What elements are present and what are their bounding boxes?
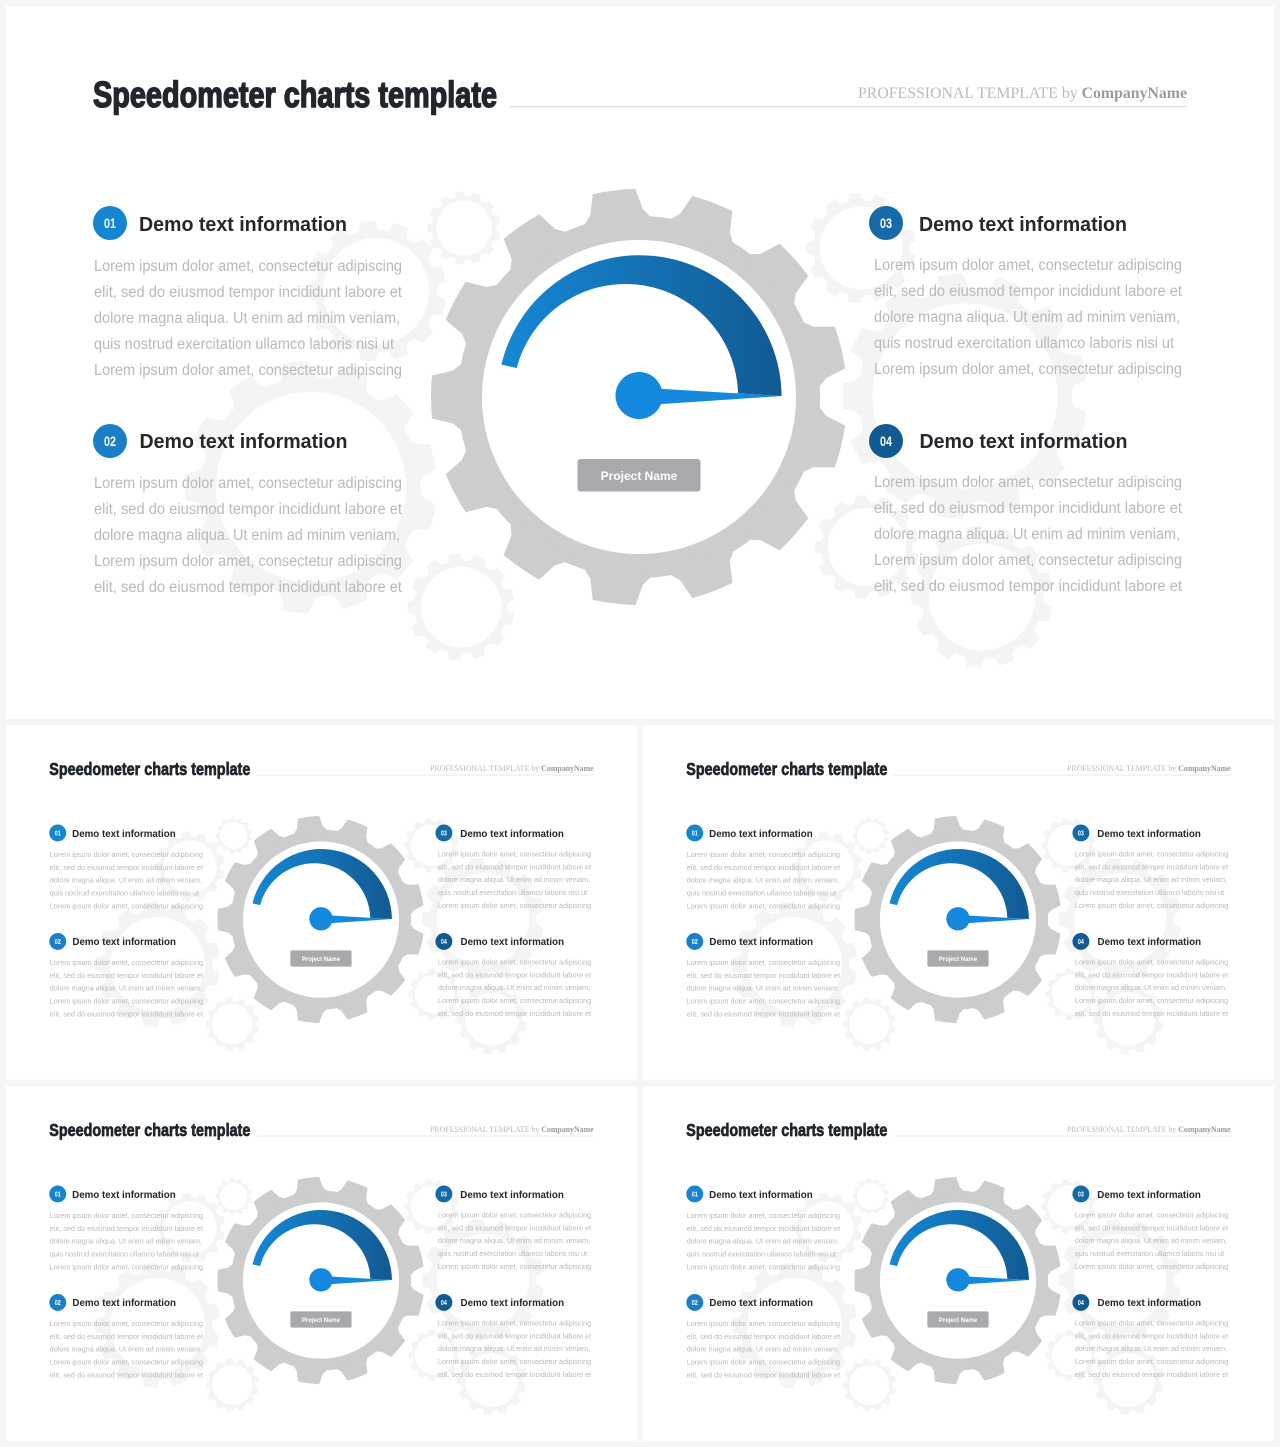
text block 01: Lorem ipsum dolor amet, consectetur adipiscing: [687, 850, 840, 859]
badge 02: [686, 1294, 703, 1311]
text block 04: [1075, 1318, 1229, 1379]
text block 02: Lorem ipsum dolor amet, consectetur adipiscing: [50, 1358, 203, 1367]
speedometer gauge: [501, 255, 782, 419]
text block 04: [438, 957, 592, 1018]
project name label: [927, 950, 989, 967]
panel: item 02: [49, 1294, 204, 1380]
badge 04: [435, 1294, 452, 1311]
text block 01: elit, sed do eiusmod tempor incididunt labore et: [50, 863, 204, 872]
main gear: [854, 815, 1062, 1024]
text block 02: Lorem ipsum dolor amet, consectetur adipiscing: [50, 958, 203, 967]
text block 02: Lorem ipsum dolor amet, consectetur adipiscing: [687, 997, 840, 1006]
slide: thumbnail top left: [6, 725, 637, 1080]
subtitle: PROFESSIONAL TEMPLATE by CompanyName: [1067, 1125, 1231, 1134]
text block 02: [50, 1319, 204, 1380]
text block 04: Lorem ipsum dolor amet, consectetur adipiscing: [1075, 1357, 1228, 1366]
text block 03: Lorem ipsum dolor amet, consectetur adipiscing: [1075, 1262, 1228, 1271]
panel: item 02: [686, 933, 841, 1019]
text block 02: Lorem ipsum dolor amet, consectetur adipiscing: [94, 553, 402, 570]
speedometer gauge: [890, 1210, 1029, 1292]
heading 03: Demo text information: [460, 1190, 564, 1201]
text block 02: dolore magna aliqua. Ut enim ad minim veniam,: [687, 1345, 839, 1354]
badge 03: [435, 1186, 452, 1202]
slide: thumbnail top right: [643, 725, 1274, 1080]
heading 03: Demo text information: [1097, 829, 1201, 840]
text block 02: [50, 958, 204, 1019]
panel: item 03: [1072, 825, 1229, 910]
text block 01: [50, 1211, 204, 1272]
text block 01: quis nostrud exercitation ullamco laboris nisi ut: [50, 889, 200, 898]
text block 01: Lorem ipsum dolor amet, consectetur adipiscing: [687, 1211, 840, 1220]
slide: thumbnail bottom right: [643, 1086, 1274, 1441]
badge 01: 01: [104, 215, 116, 231]
text block 04: elit, sed do eiusmod tempor incididunt labore et: [1075, 1370, 1229, 1379]
badge 03: 03: [441, 830, 447, 837]
text block 03: [874, 257, 1183, 378]
header rule: [894, 774, 1231, 776]
panel: item 03: [869, 206, 1183, 378]
badge 04: 04: [1078, 939, 1084, 946]
text block 03: Lorem ipsum dolor amet, consectetur adipiscing: [1075, 849, 1228, 858]
background gears: [732, 1178, 1182, 1416]
text block 04: elit, sed do eiusmod tempor incididunt labore et: [874, 500, 1183, 517]
text block 04: dolore magna aliqua. Ut enim ad minim veniam,: [438, 1344, 590, 1353]
slide: main large slide: [6, 6, 1274, 719]
slide: thumbnail bottom left: [6, 1086, 637, 1441]
text block 04: elit, sed do eiusmod tempor incididunt labore et: [438, 1370, 592, 1379]
title: Speedometer charts template: [49, 1120, 250, 1140]
project name label: Project Name: [939, 957, 978, 963]
title: Speedometer charts template: [686, 1120, 887, 1140]
text block 04: [438, 1318, 592, 1379]
text block 02: [687, 958, 841, 1019]
panel: item 03: [435, 825, 592, 910]
text block 01: dolore magna aliqua. Ut enim ad minim veniam,: [50, 1237, 202, 1246]
text block 03: Lorem ipsum dolor amet, consectetur adipiscing: [1075, 1210, 1228, 1219]
text block 02: elit, sed do eiusmod tempor incididunt labore et: [50, 971, 204, 980]
text block 04: elit, sed do eiusmod tempor incididunt labore et: [1075, 1009, 1229, 1018]
text block 03: Lorem ipsum dolor amet, consectetur adipiscing: [438, 849, 591, 858]
speedometer gauge: [890, 849, 1029, 931]
text block 01: elit, sed do eiusmod tempor incididunt labore et: [50, 1224, 204, 1233]
text block 04: Lorem ipsum dolor amet, consectetur adipiscing: [438, 1357, 591, 1366]
badge 01: [686, 1186, 703, 1202]
text block 01: [94, 258, 403, 379]
text block 01: [687, 850, 841, 911]
panel: item 02: [686, 1294, 841, 1380]
heading 03: Demo text information: [460, 829, 564, 840]
text block 03: dolore magna aliqua. Ut enim ad minim veniam,: [438, 875, 590, 884]
badge 01: 01: [692, 830, 698, 837]
badge 03: [869, 206, 903, 240]
badge 04: [1072, 933, 1089, 950]
badge 03: [435, 825, 452, 841]
panel: item 04: [1072, 933, 1229, 1018]
title: Speedometer charts template: [49, 759, 250, 779]
text block 02: dolore magna aliqua. Ut enim ad minim veniam,: [50, 1345, 202, 1354]
text block 04: Lorem ipsum dolor amet, consectetur adipiscing: [874, 552, 1182, 569]
header rule: [257, 774, 594, 776]
subtitle: PROFESSIONAL TEMPLATE by CompanyName: [430, 764, 594, 773]
project name label: [578, 459, 700, 492]
project name label: [927, 1311, 989, 1328]
heading 01: Demo text information: [72, 829, 176, 840]
badge 02: 02: [692, 1300, 698, 1307]
text block 04: elit, sed do eiusmod tempor incididunt labore et: [438, 1009, 592, 1018]
text block 01: quis nostrud exercitation ullamco laboris nisi ut: [94, 336, 395, 353]
badge 02: 02: [55, 1300, 61, 1307]
header rule: [257, 1135, 594, 1137]
project name label: [290, 950, 352, 967]
main gear: [217, 815, 425, 1024]
panel: item 01: [49, 1186, 204, 1272]
project name label: Project Name: [939, 1318, 978, 1324]
heading 01: Demo text information: [709, 829, 813, 840]
title: Speedometer charts template: [93, 74, 497, 115]
text block 01: Lorem ipsum dolor amet, consectetur adipiscing: [50, 1263, 203, 1272]
text block 03: Lorem ipsum dolor amet, consectetur adipiscing: [874, 361, 1182, 378]
text block 02: dolore magna aliqua. Ut enim ad minim veniam,: [687, 984, 839, 993]
text block 02: elit, sed do eiusmod tempor incididunt labore et: [50, 1332, 204, 1341]
text block 03: Lorem ipsum dolor amet, consectetur adipiscing: [438, 1210, 591, 1219]
heading 03: Demo text information: [1097, 1190, 1201, 1201]
badge 03: 03: [1078, 1191, 1084, 1198]
text block 01: dolore magna aliqua. Ut enim ad minim veniam,: [687, 1237, 839, 1246]
text block 02: elit, sed do eiusmod tempor incididunt labore et: [50, 1010, 204, 1019]
text block 04: elit, sed do eiusmod tempor incididunt labore et: [1075, 970, 1229, 979]
text block 02: Lorem ipsum dolor amet, consectetur adipiscing: [687, 1358, 840, 1367]
badge 02: 02: [692, 939, 698, 946]
text block 03: [438, 1210, 592, 1271]
text block 04: Lorem ipsum dolor amet, consectetur adipiscing: [874, 474, 1182, 491]
text block 04: Lorem ipsum dolor amet, consectetur adipiscing: [438, 1318, 591, 1327]
text block 01: quis nostrud exercitation ullamco laboris nisi ut: [687, 1250, 837, 1259]
badge 02: 02: [55, 939, 61, 946]
project name label: [290, 1311, 352, 1328]
text block 02: Lorem ipsum dolor amet, consectetur adipiscing: [687, 958, 840, 967]
panel: item 02: [49, 933, 204, 1019]
badge 02: [686, 933, 703, 950]
text block 02: Lorem ipsum dolor amet, consectetur adipiscing: [50, 997, 203, 1006]
badge 01: 01: [55, 830, 61, 837]
panel: item 01: [686, 1186, 841, 1272]
project name label: Project Name: [601, 469, 678, 483]
badge 04: [435, 933, 452, 950]
text block 01: Lorem ipsum dolor amet, consectetur adipiscing: [50, 1211, 203, 1220]
panel: item 01: [93, 206, 403, 379]
text block 03: dolore magna aliqua. Ut enim ad minim veniam,: [874, 309, 1180, 326]
background gears: [95, 817, 545, 1055]
heading 04: Demo text information: [1098, 1298, 1201, 1309]
heading 01: Demo text information: [72, 1190, 176, 1201]
panel: item 04: [869, 424, 1183, 595]
text block 02: [94, 475, 403, 596]
badge 04: [1072, 1294, 1089, 1311]
text block 04: elit, sed do eiusmod tempor incididunt labore et: [438, 970, 592, 979]
text block 02: elit, sed do eiusmod tempor incididunt labore et: [50, 1371, 204, 1380]
text block 03: Lorem ipsum dolor amet, consectetur adipiscing: [438, 1262, 591, 1271]
text block 01: Lorem ipsum dolor amet, consectetur adipiscing: [94, 362, 402, 379]
text block 04: [1075, 957, 1229, 1018]
text block 04: dolore magna aliqua. Ut enim ad minim veniam,: [1075, 1344, 1227, 1353]
text block 04: [874, 474, 1183, 595]
text block 01: Lorem ipsum dolor amet, consectetur adipiscing: [94, 258, 402, 275]
background gears: [95, 1178, 545, 1416]
text block 01: quis nostrud exercitation ullamco laboris nisi ut: [50, 1250, 200, 1259]
text block 01: elit, sed do eiusmod tempor incididunt labore et: [94, 284, 403, 301]
main gear: [217, 1176, 425, 1385]
badge 03: 03: [1078, 830, 1084, 837]
badge 04: 04: [441, 939, 447, 946]
text block 02: [687, 1319, 841, 1380]
text block 03: elit, sed do eiusmod tempor incididunt labore et: [438, 1223, 592, 1232]
text block 03: quis nostrud exercitation ullamco laboris nisi ut: [874, 335, 1175, 352]
text block 04: dolore magna aliqua. Ut enim ad minim veniam,: [1075, 983, 1227, 992]
badge 04: 04: [441, 1300, 447, 1307]
slide background: [643, 1086, 1274, 1441]
text block 03: dolore magna aliqua. Ut enim ad minim veniam,: [1075, 1236, 1227, 1245]
text block 02: elit, sed do eiusmod tempor incididunt labore et: [687, 1371, 841, 1380]
badge 02: [93, 424, 127, 458]
header rule: [894, 1135, 1231, 1137]
badge 03: 03: [441, 1191, 447, 1198]
text block 04: Lorem ipsum dolor amet, consectetur adipiscing: [1075, 1318, 1228, 1327]
speedometer gauge: [253, 849, 392, 931]
text block 01: dolore magna aliqua. Ut enim ad minim veniam,: [50, 876, 202, 885]
text block 02: elit, sed do eiusmod tempor incididunt labore et: [94, 579, 403, 596]
slide background: [6, 725, 637, 1080]
text block 04: elit, sed do eiusmod tempor incididunt labore et: [438, 1331, 592, 1340]
text block 04: elit, sed do eiusmod tempor incididunt labore et: [1075, 1331, 1229, 1340]
text block 03: dolore magna aliqua. Ut enim ad minim veniam,: [1075, 875, 1227, 884]
text block 02: elit, sed do eiusmod tempor incididunt labore et: [687, 1332, 841, 1341]
heading 04: Demo text information: [461, 1298, 564, 1309]
text block 02: elit, sed do eiusmod tempor incididunt labore et: [94, 501, 403, 518]
text block 03: [438, 849, 592, 910]
badge 04: [869, 424, 903, 458]
badge 01: [93, 206, 127, 240]
speedometer gauge: [253, 1210, 392, 1292]
text block 03: quis nostrud exercitation ullamco laboris nisi ut: [438, 888, 588, 897]
subtitle: PROFESSIONAL TEMPLATE by CompanyName: [430, 1125, 594, 1134]
badge 01: [49, 825, 66, 841]
text block 02: Lorem ipsum dolor amet, consectetur adipiscing: [50, 1319, 203, 1328]
badge 03: 03: [880, 215, 892, 231]
background gears: [185, 191, 1089, 669]
text block 02: Lorem ipsum dolor amet, consectetur adipiscing: [687, 1319, 840, 1328]
badge 01: [49, 1186, 66, 1202]
text block 04: Lorem ipsum dolor amet, consectetur adipiscing: [438, 957, 591, 966]
text block 03: dolore magna aliqua. Ut enim ad minim veniam,: [438, 1236, 590, 1245]
badge 02: [49, 933, 66, 950]
text block 03: quis nostrud exercitation ullamco laboris nisi ut: [1075, 888, 1225, 897]
text block 01: elit, sed do eiusmod tempor incididunt labore et: [687, 1224, 841, 1233]
panel: item 03: [435, 1186, 592, 1271]
text block 04: dolore magna aliqua. Ut enim ad minim veniam,: [874, 526, 1180, 543]
text block 03: [1075, 849, 1229, 910]
text block 04: Lorem ipsum dolor amet, consectetur adipiscing: [438, 996, 591, 1005]
background gears: [732, 817, 1182, 1055]
text block 04: Lorem ipsum dolor amet, consectetur adipiscing: [1075, 957, 1228, 966]
heading 04: Demo text information: [461, 937, 564, 948]
badge 03: [1072, 1186, 1089, 1202]
badge 04: 04: [1078, 1300, 1084, 1307]
header rule: [510, 106, 1187, 107]
heading 02: Demo text information: [72, 1298, 176, 1309]
text block 02: dolore magna aliqua. Ut enim ad minim veniam,: [94, 527, 400, 544]
panel: item 04: [435, 1294, 592, 1379]
text block 03: quis nostrud exercitation ullamco laboris nisi ut: [1075, 1249, 1225, 1258]
heading 01: Demo text information: [139, 214, 347, 236]
text block 03: elit, sed do eiusmod tempor incididunt labore et: [1075, 862, 1229, 871]
text block 02: Lorem ipsum dolor amet, consectetur adipiscing: [94, 475, 402, 492]
project name label: Project Name: [302, 1318, 341, 1324]
text block 02: elit, sed do eiusmod tempor incididunt labore et: [687, 1010, 841, 1019]
text block 03: Lorem ipsum dolor amet, consectetur adipiscing: [438, 901, 591, 910]
text block 03: elit, sed do eiusmod tempor incididunt labore et: [874, 283, 1183, 300]
heading 02: Demo text information: [709, 937, 813, 948]
main gear: [854, 1176, 1062, 1385]
text block 02: elit, sed do eiusmod tempor incididunt labore et: [687, 971, 841, 980]
subtitle: PROFESSIONAL TEMPLATE by CompanyName: [1067, 764, 1231, 773]
panel: item 01: [686, 825, 841, 911]
badge 01: [686, 825, 703, 841]
text block 01: Lorem ipsum dolor amet, consectetur adipiscing: [687, 1263, 840, 1272]
badge 01: 01: [55, 1191, 61, 1198]
heading 02: Demo text information: [72, 937, 176, 948]
heading 04: Demo text information: [1098, 937, 1201, 948]
main gear: [431, 187, 849, 607]
heading 02: Demo text information: [709, 1298, 813, 1309]
heading 02: Demo text information: [140, 431, 348, 453]
text block 03: quis nostrud exercitation ullamco laboris nisi ut: [438, 1249, 588, 1258]
heading 03: Demo text information: [919, 214, 1127, 236]
text block 01: Lorem ipsum dolor amet, consectetur adipiscing: [50, 850, 203, 859]
panel: item 02: [93, 424, 403, 596]
badge 01: 01: [692, 1191, 698, 1198]
text block 01: dolore magna aliqua. Ut enim ad minim veniam,: [94, 310, 400, 327]
text block 03: elit, sed do eiusmod tempor incididunt labore et: [438, 862, 592, 871]
heading 04: Demo text information: [920, 431, 1128, 453]
panel: item 03: [1072, 1186, 1229, 1271]
badge 04: 04: [880, 433, 892, 449]
text block 03: Lorem ipsum dolor amet, consectetur adipiscing: [874, 257, 1182, 274]
text block 01: [50, 850, 204, 911]
text block 01: elit, sed do eiusmod tempor incididunt labore et: [687, 863, 841, 872]
text block 03: elit, sed do eiusmod tempor incididunt labore et: [1075, 1223, 1229, 1232]
text block 03: Lorem ipsum dolor amet, consectetur adipiscing: [1075, 901, 1228, 910]
text block 03: [1075, 1210, 1229, 1271]
text block 01: Lorem ipsum dolor amet, consectetur adipiscing: [50, 902, 203, 911]
slide background: [6, 1086, 637, 1441]
slide background: [6, 6, 1274, 719]
text block 01: quis nostrud exercitation ullamco laboris nisi ut: [687, 889, 837, 898]
panel: item 01: [49, 825, 204, 911]
text block 04: Lorem ipsum dolor amet, consectetur adipiscing: [1075, 996, 1228, 1005]
text block 02: dolore magna aliqua. Ut enim ad minim veniam,: [50, 984, 202, 993]
subtitle: PROFESSIONAL TEMPLATE by CompanyName: [858, 85, 1187, 102]
text block 01: Lorem ipsum dolor amet, consectetur adipiscing: [687, 902, 840, 911]
slide background: [643, 725, 1274, 1080]
text block 01: dolore magna aliqua. Ut enim ad minim veniam,: [687, 876, 839, 885]
badge 03: [1072, 825, 1089, 841]
panel: item 04: [1072, 1294, 1229, 1379]
title: Speedometer charts template: [686, 759, 887, 779]
panel: item 04: [435, 933, 592, 1018]
text block 01: [687, 1211, 841, 1272]
project name label: Project Name: [302, 957, 341, 963]
badge 02: 02: [104, 433, 116, 449]
text block 04: dolore magna aliqua. Ut enim ad minim veniam,: [438, 983, 590, 992]
text block 04: elit, sed do eiusmod tempor incididunt labore et: [874, 578, 1183, 595]
badge 02: [49, 1294, 66, 1311]
heading 01: Demo text information: [709, 1190, 813, 1201]
